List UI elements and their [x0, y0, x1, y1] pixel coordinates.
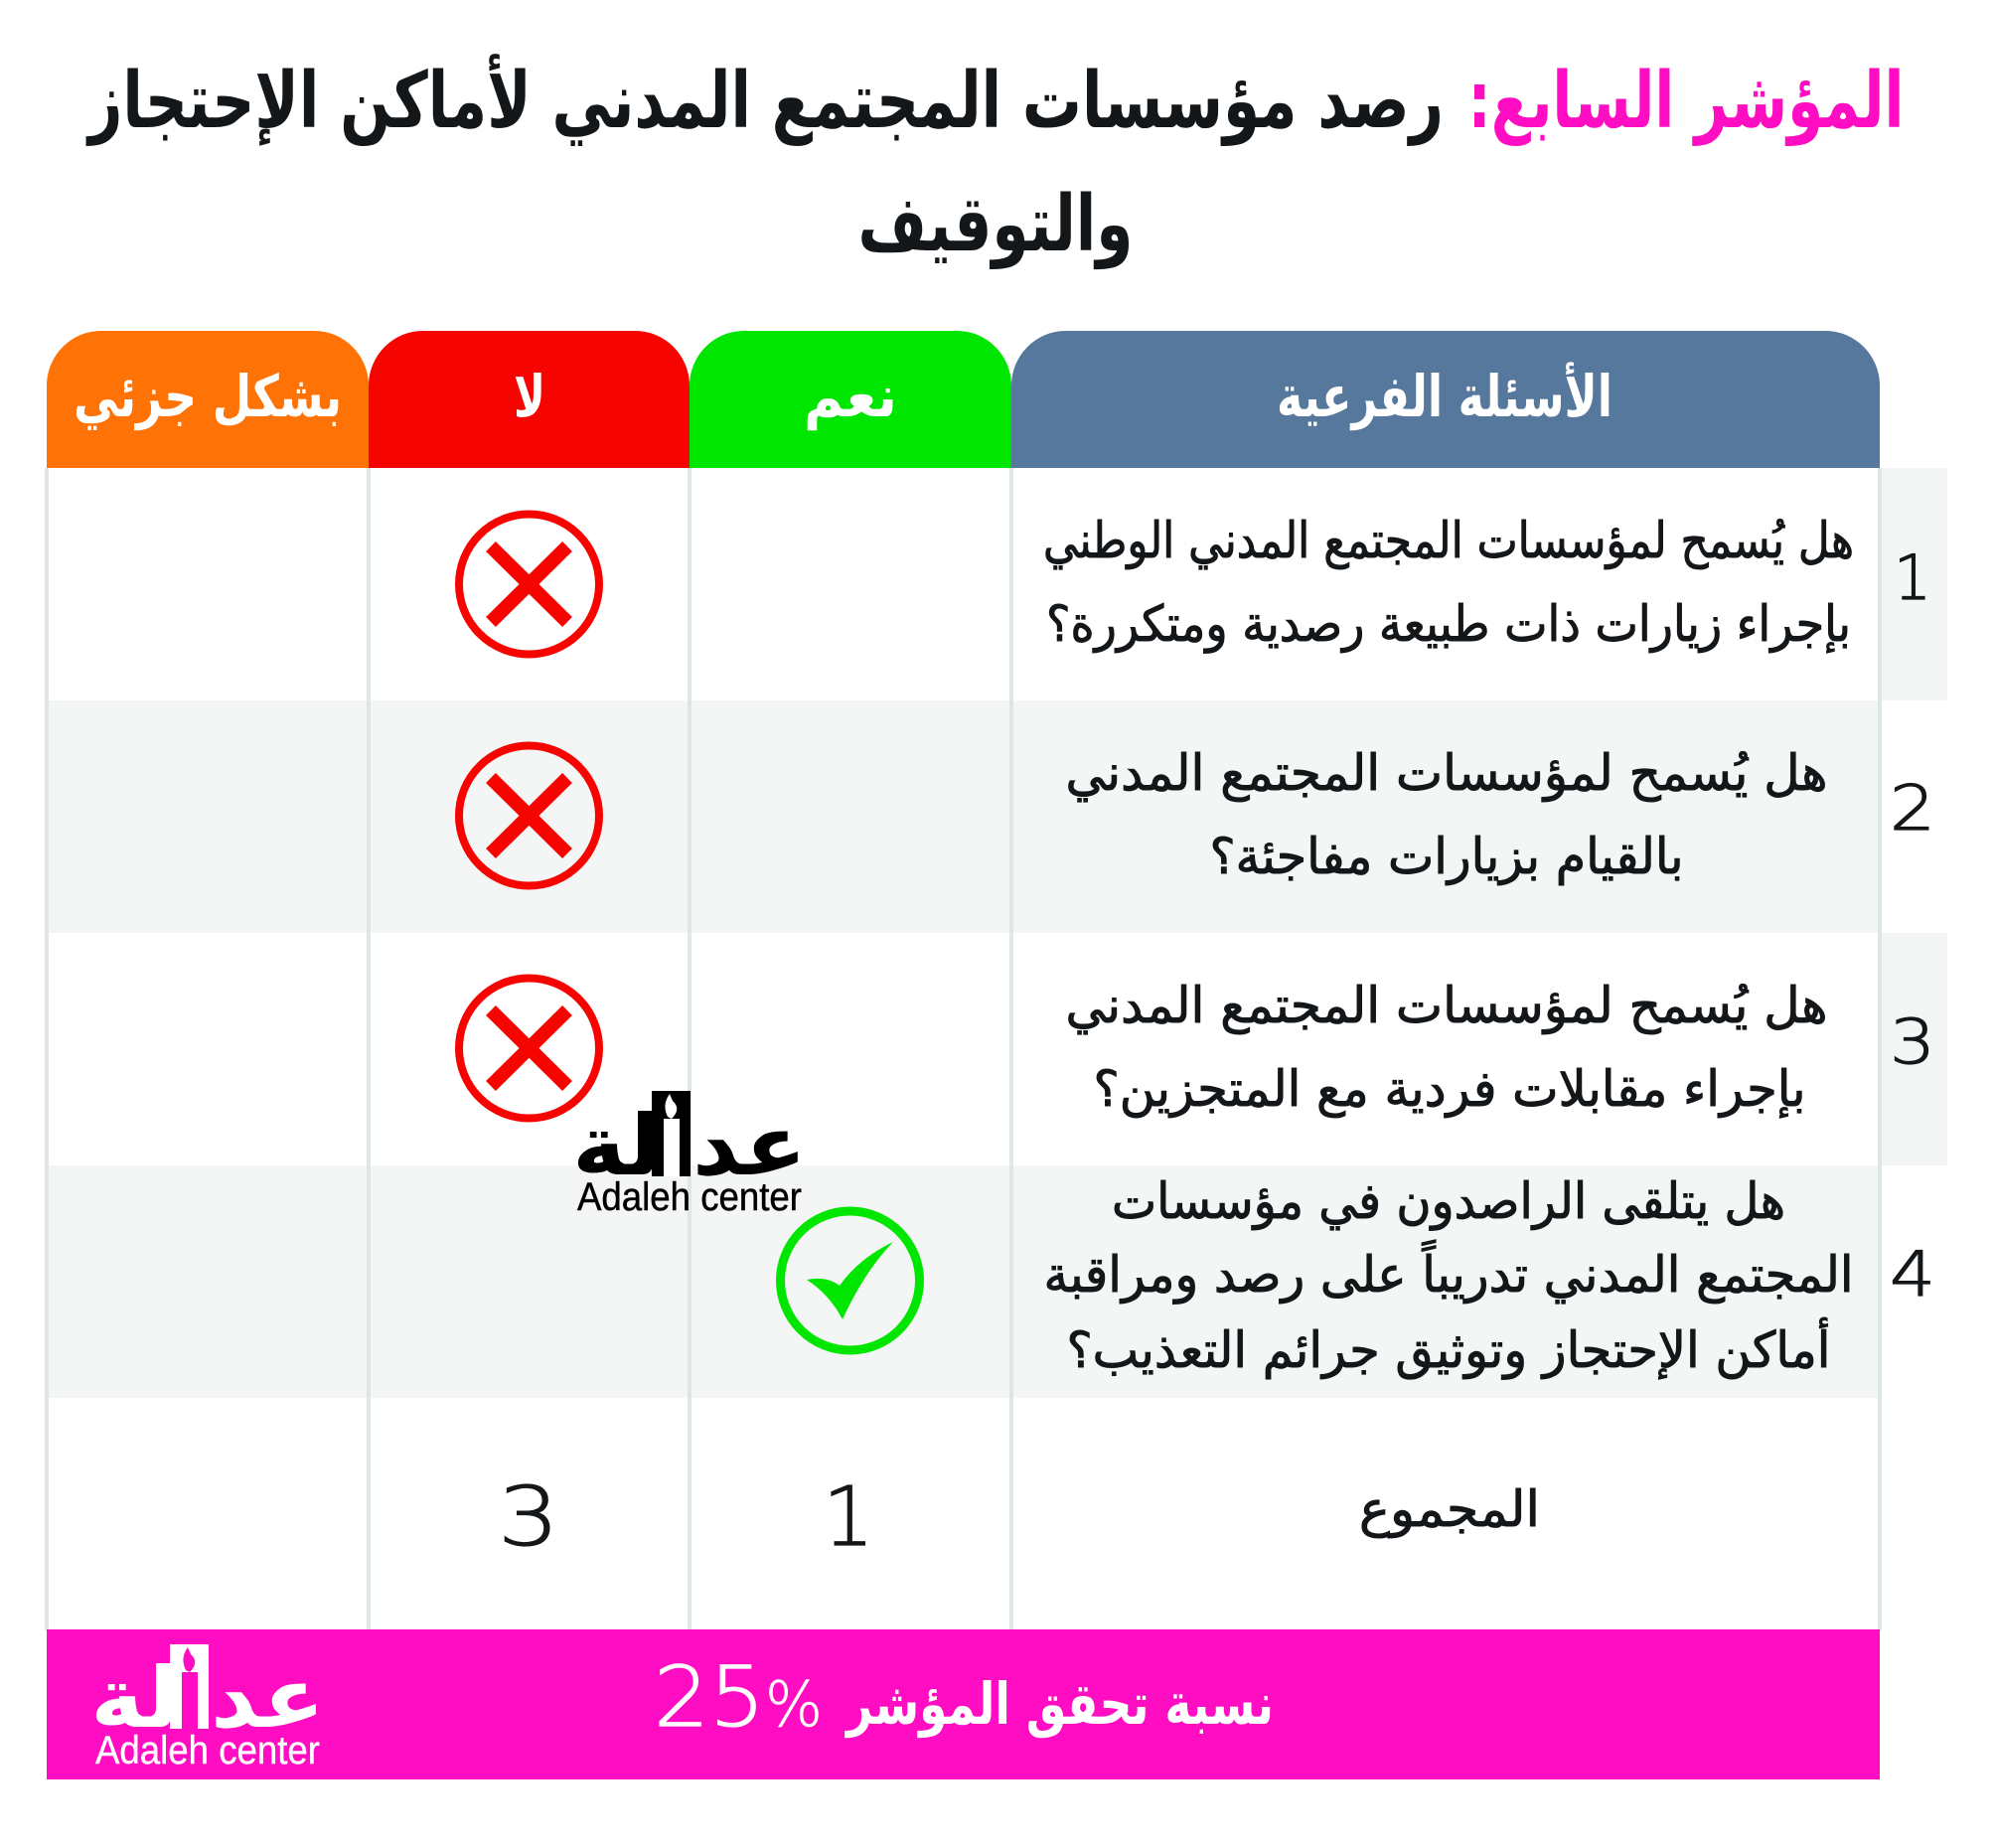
- question 3: هل يُسمح لمؤسسات المجتمع المدني: [1065, 977, 1828, 1035]
- totals row: 3: [498, 1470, 559, 1565]
- question 4: أماكن الإحتجاز وتوثيق جرائم التعذيب؟: [1067, 1317, 1830, 1380]
- question 3: بإجراء مقابلات فردية مع المتجزين؟: [1093, 1060, 1806, 1119]
- title: رصد مؤسسات المجتمع المدني لأماكن الإحتجاز: [85, 55, 1444, 147]
- icon: green check row 4: [781, 1211, 920, 1350]
- totals row: المجموع: [1359, 1480, 1540, 1538]
- row numbers: 3: [1890, 1005, 1935, 1078]
- header: yes: [690, 331, 1011, 468]
- row numbers: 2: [1890, 772, 1935, 845]
- question 2: [1065, 744, 1828, 885]
- index percentage: [654, 1648, 823, 1746]
- logo: black Adaleh: Adaleh center: [577, 1175, 802, 1219]
- row numbers: 1: [1894, 541, 1931, 614]
- icon: red cross row 2: [459, 745, 599, 886]
- row numbers: 4: [1890, 1238, 1935, 1310]
- question 2: بالقيام بزيارات مفاجئة؟: [1210, 828, 1683, 885]
- question 2: هل يُسمح لمؤسسات المجتمع المدني: [1065, 744, 1828, 803]
- logo: white Adaleh: عدالة: [90, 1649, 325, 1747]
- question 1: [1043, 512, 1854, 654]
- icon: red cross row 1: [459, 515, 599, 654]
- table row shading: [47, 468, 1947, 1398]
- footer bar: [47, 1629, 1880, 1779]
- title: والتوقيف: [858, 180, 1133, 269]
- row numbers: [1890, 541, 1935, 1310]
- index percentage: 25: [654, 1648, 765, 1746]
- question 1: بإجراء زيارات ذات طبيعة رصدية ومتكررة؟: [1046, 595, 1851, 654]
- header: partial: بشكل جزئي: [74, 363, 342, 431]
- totals row: [498, 1470, 1540, 1565]
- logo: black Adaleh: [572, 1091, 807, 1219]
- question 3: [1065, 977, 1828, 1119]
- header: sub-questions: الأسئلة الفرعية: [1277, 362, 1612, 431]
- header: sub-questions: [1011, 331, 1880, 468]
- index percentage: %: [765, 1668, 823, 1741]
- header: yes: نعم: [804, 363, 897, 430]
- question 4: [1043, 1172, 1854, 1380]
- header: no: لا: [514, 363, 545, 430]
- header: partial: [47, 331, 369, 468]
- totals row: 1: [823, 1470, 874, 1565]
- footer label: نسبة تحقق المؤشر: [844, 1670, 1274, 1739]
- title: [85, 55, 1904, 269]
- icon: red cross row 3: [459, 978, 599, 1119]
- question 4: هل يتلقى الراصدون في مؤسسات: [1112, 1172, 1785, 1231]
- logo: white Adaleh: [90, 1644, 325, 1772]
- question 1: هل يُسمح لمؤسسات المجتمع المدني الوطني: [1043, 512, 1854, 570]
- question 4: المجتمع المدني تدريباً على رصد ومراقبة: [1043, 1239, 1854, 1305]
- header: no: [369, 331, 690, 468]
- logo: black Adaleh: عدالة: [572, 1097, 807, 1194]
- logo: white Adaleh: Adaleh center: [95, 1729, 320, 1772]
